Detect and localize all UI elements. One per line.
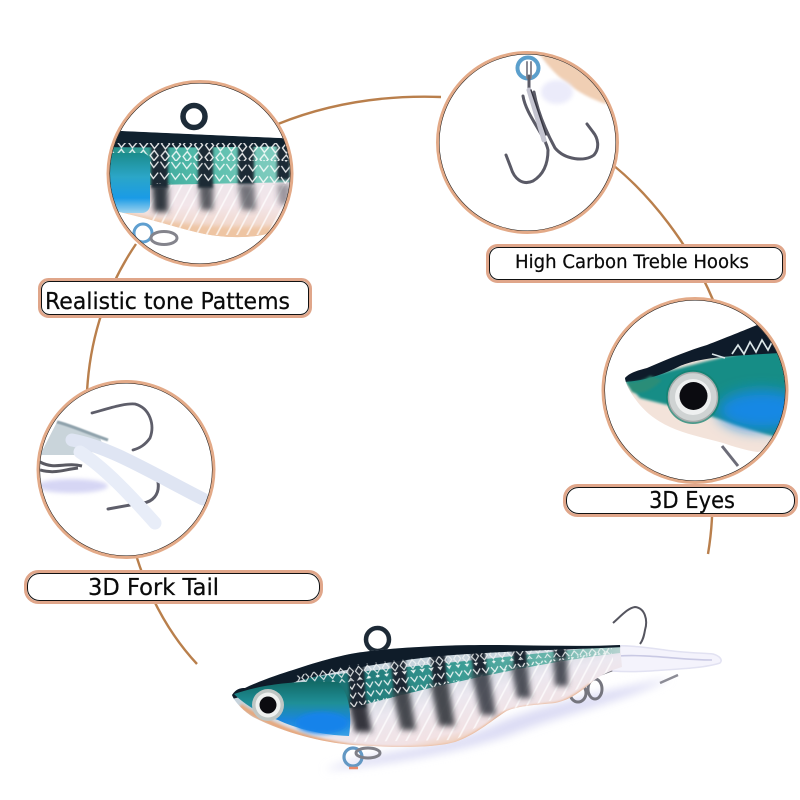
label: 3D Eyes	[564, 486, 796, 516]
split ring	[518, 58, 538, 78]
connecting arc	[87, 97, 713, 664]
label: High Carbon Treble Hooks: High Carbon Treble Hooks	[515, 251, 749, 273]
scale rows on flank	[350, 653, 612, 708]
shadow	[36, 479, 108, 493]
label: 3D Fork Tail: 3D Fork Tail	[88, 575, 219, 601]
dark stripes lower	[348, 656, 568, 732]
cast shadow	[325, 678, 670, 770]
lower split ring	[134, 224, 177, 244]
circle image: treble hook close-up	[438, 40, 625, 232]
belly lines	[350, 650, 613, 742]
lure body	[232, 645, 622, 747]
label: High Carbon Treble Hooks	[488, 246, 784, 282]
split ring	[40, 462, 82, 472]
top rear hook	[613, 607, 646, 644]
top attachment ring	[366, 628, 389, 651]
panel: realistic tone patterns	[40, 82, 310, 316]
upper hook	[92, 404, 152, 450]
label: Realistic tone Pattems: Realistic tone Pattems	[45, 289, 290, 315]
scale highlights	[712, 338, 774, 358]
fork tail	[612, 646, 721, 672]
lure eye	[252, 689, 284, 721]
head and blue cheek	[234, 682, 350, 736]
small rear hook point	[660, 675, 678, 683]
teal band	[300, 645, 620, 708]
treble hook	[506, 62, 598, 183]
scale rows on back	[296, 648, 612, 686]
attachment ring	[183, 106, 205, 128]
upper fork	[72, 440, 203, 499]
rear split rings	[570, 670, 612, 702]
lure belly edge	[539, 56, 606, 105]
panel: 3D fork tail	[26, 382, 322, 602]
main lure illustration	[225, 607, 721, 770]
dark stripes upper	[347, 648, 566, 708]
label: 3D Eyes: 3D Eyes	[649, 488, 735, 514]
circle image: eye close-up	[603, 298, 800, 482]
belly split rings	[344, 748, 380, 768]
hook shadow	[541, 80, 573, 104]
label: Realistic tone Pattems	[40, 280, 310, 316]
dark back	[232, 645, 620, 699]
hook wire	[722, 446, 738, 466]
peach belly edge	[240, 684, 594, 749]
panel: high carbon treble hooks	[438, 40, 784, 282]
circle image: fork tail close-up	[36, 382, 214, 558]
lower fork	[80, 452, 155, 523]
circle image: body pattern close-up	[100, 82, 300, 266]
lower hook	[108, 482, 158, 509]
tail body	[40, 422, 105, 455]
label: 3D Fork Tail	[26, 572, 322, 602]
3D eye	[666, 370, 720, 424]
panel: 3D eyes	[564, 298, 800, 516]
